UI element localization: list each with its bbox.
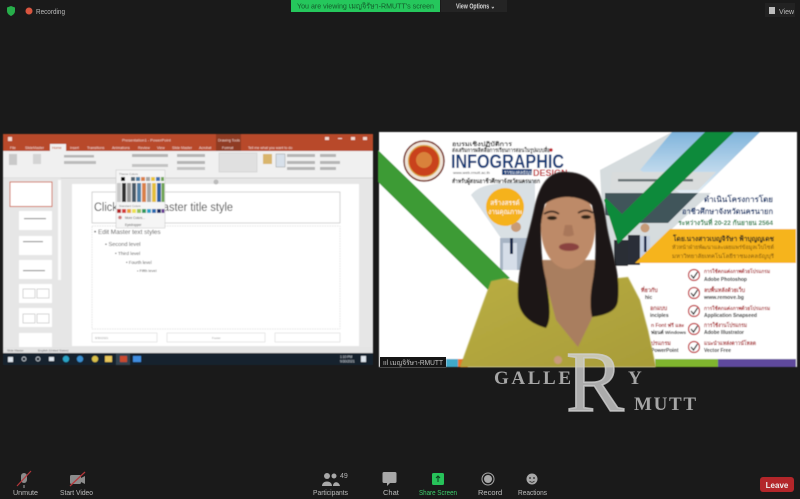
topic list: right column: Vector Free — [704, 348, 731, 354]
toolbar: participants — [313, 473, 348, 497]
topic list: right column: www.remove.bg — [703, 295, 744, 301]
powerpoint title bar: Animations — [112, 146, 130, 150]
yellow speaker band: โดย.นางสาวเบญจิรัษา ฟ้าบุญญเดช — [672, 234, 774, 243]
yellow speaker band: หัวหน้าฝ่ายพัฒนาและเผยแพร่ข้อมูลเว็บไซต์ — [672, 243, 774, 251]
flyer heading — [451, 140, 568, 186]
topic list: right column: การใช้ตกแต่งภาพด้วยโปรแกรม — [704, 268, 770, 275]
flyer heading: DESIGN — [533, 168, 568, 178]
toolbar: participants: 49 — [340, 473, 348, 480]
button: view: View — [779, 9, 795, 16]
thumbnail pane — [3, 178, 61, 347]
presenter name tag: ııl เมญจิรัษา-RMUTT — [383, 359, 444, 367]
toolbar: share screen: Share Screen — [419, 488, 457, 497]
project dates: ระหว่างวันที่ 20-22 กันยายน 2564 — [678, 217, 773, 227]
toolbar: chat: Chat — [383, 488, 400, 497]
powerpoint title bar — [3, 134, 373, 151]
orange circle badge — [486, 188, 524, 226]
watermark: gallery rmutt — [494, 333, 696, 430]
slide master: • Fourth level — [126, 260, 152, 265]
button: leave — [760, 477, 794, 492]
toolbar: video control: Start Video — [60, 488, 93, 497]
status bar — [3, 347, 373, 353]
orange circle badge: งานคุณภาพ — [488, 209, 522, 216]
topic list: partially hidden column: PowerPoint — [651, 348, 679, 354]
toolbar: chat — [382, 472, 400, 497]
powerpoint title bar: Transitions — [87, 146, 105, 150]
colour picker dropdown: Standard Colors — [119, 204, 141, 208]
powerpoint title bar: SlideMaster — [25, 146, 45, 150]
topic list: right column: Application Snapseed — [704, 313, 757, 319]
powerpoint title bar: Home — [52, 146, 62, 150]
orange circle badge: สร้างสรรค์ — [490, 199, 520, 207]
toolbar: participants: Participants — [313, 488, 348, 497]
colour picker dropdown: Eyedropper — [125, 223, 142, 227]
topic list: partially hidden column — [641, 286, 686, 354]
button: view options: View Options ⌄ — [456, 4, 495, 10]
flyer heading: INFOGRAPHIC — [451, 151, 564, 173]
powerpoint title bar: Presentation1 - PowerPoint — [122, 138, 172, 142]
powerpoint title bar: Drawing Tools — [218, 138, 240, 142]
watermark: gallery rmutt: Y — [628, 368, 642, 389]
project dates — [678, 194, 773, 227]
toolbar: reactions: Reactions — [518, 488, 547, 497]
institute seal — [404, 141, 444, 181]
coloured footer strip — [446, 359, 796, 367]
presenter — [460, 172, 656, 367]
panel: powerpoint screen share — [3, 134, 373, 365]
topic list: right column: ลบพื้นหลังด้วยเว็บ — [704, 285, 745, 294]
topic list: right column: Adobe Illustrator — [704, 330, 744, 336]
topic list: partially hidden column: ฟอนต์ Windows — [651, 329, 686, 336]
colour picker dropdown: More Colors... — [125, 216, 145, 220]
powerpoint title bar: View — [157, 146, 165, 150]
watermark: gallery rmutt: GALLE — [494, 368, 571, 389]
status bar: Slide Master — [7, 348, 24, 352]
button: leave: Leave — [766, 481, 789, 490]
watermark: gallery rmutt: MUTT — [634, 394, 696, 415]
windows taskbar — [3, 353, 373, 365]
topic list: right column: การใช้ตกแต่งภาพด้วยโปรแกรม — [704, 305, 770, 312]
topic list: right column: การใช้งานโปรแกรม — [704, 321, 747, 329]
green diagonal stripe — [378, 150, 510, 290]
topic list: partially hidden column: อกแบบ — [650, 305, 668, 312]
toolbar: audio control — [13, 471, 38, 497]
topic list: partially hidden column: n Font ฟรี และ — [651, 322, 685, 329]
presenter name tag — [380, 357, 446, 367]
toolbar: record — [478, 473, 502, 497]
toolbar: video control — [60, 472, 93, 497]
flyer heading: ส่งเสริมการผลิตสื่อการเรียนการสอนในรูปแบบสื่อ — [452, 146, 550, 155]
topic list: partially hidden column: hic — [645, 295, 652, 301]
top bar: security and recording status: Recording — [36, 9, 65, 16]
watermark: gallery rmutt: R — [566, 333, 624, 430]
green check mark — [604, 132, 734, 244]
topic list: partially hidden column: ปรแกรม — [651, 339, 671, 347]
project dates: ดำเนินโครงการโดย — [704, 194, 773, 204]
toolbar: audio control: Unmute — [13, 488, 38, 497]
yellow speaker band: มหาวิทยาลัยเทคโนโลยีราชมงคลธัญบุรี — [672, 252, 774, 260]
windows taskbar: 9/30/2021 — [340, 360, 355, 364]
powerpoint title bar: Slide Master — [172, 146, 193, 150]
powerpoint title bar: Acrobat — [199, 146, 211, 150]
ribbon — [3, 151, 373, 178]
colour picker dropdown: Theme Colors — [119, 172, 138, 176]
slide master: Click to edit Master title style — [94, 202, 233, 214]
status bar: English (United States) — [38, 348, 69, 352]
powerpoint title bar: Format — [222, 146, 233, 150]
toolbar: reactions — [518, 474, 547, 497]
project dates: อาชีวศึกษาจังหวัดนครนายก — [682, 207, 773, 216]
top bar: security and recording status — [7, 6, 65, 16]
panel: infographic design flyer with presenter — [378, 132, 797, 367]
topic list: right column: Adobe Photoshop — [704, 277, 747, 283]
yellow speaker band — [635, 229, 796, 263]
slide master: • Second level — [105, 242, 141, 248]
button: view options — [441, 0, 507, 12]
building photo — [471, 132, 760, 275]
powerpoint title bar: File — [10, 146, 16, 150]
banner: viewing screen notice: You are viewing เมญจิรัษา-RMUTT's screen — [297, 2, 434, 10]
powerpoint title bar: Insert — [70, 146, 79, 150]
slide master — [72, 180, 359, 346]
powerpoint title bar: Tell me what you want to do — [248, 146, 292, 150]
flyer heading: อบรมเชิงปฏิบัติการ — [452, 140, 513, 148]
windows taskbar: 1:10 PM — [340, 355, 353, 359]
flyer heading: www.web.rmutt.ac.th — [453, 170, 490, 175]
topic list: partially hidden column: inciples — [650, 313, 669, 319]
colour picker dropdown — [116, 170, 165, 228]
powerpoint title bar: Review — [138, 146, 150, 150]
topic list: partially hidden column: ที่ยวกับ — [641, 286, 658, 294]
toolbar: record: Record — [478, 488, 502, 497]
slide master: Footer — [212, 336, 221, 340]
toolbar: share screen — [419, 473, 457, 497]
slide master: 9/30/2021 — [95, 336, 109, 340]
flyer heading: สำหรับผู้สอนอาชีวศึกษาจังหวัดนครนายก — [452, 177, 540, 186]
slide master: • Edit Master text styles — [94, 229, 161, 236]
topic list: right column — [688, 268, 770, 354]
topic list: right column: แนะนำแหล่งดาวน์โหลด — [704, 339, 756, 347]
button: view — [765, 3, 795, 17]
slide master: • Fifth level — [137, 268, 157, 273]
slide master: • Third level — [115, 251, 140, 257]
flyer heading: ราชมงคลธัญบุรี — [504, 170, 535, 176]
